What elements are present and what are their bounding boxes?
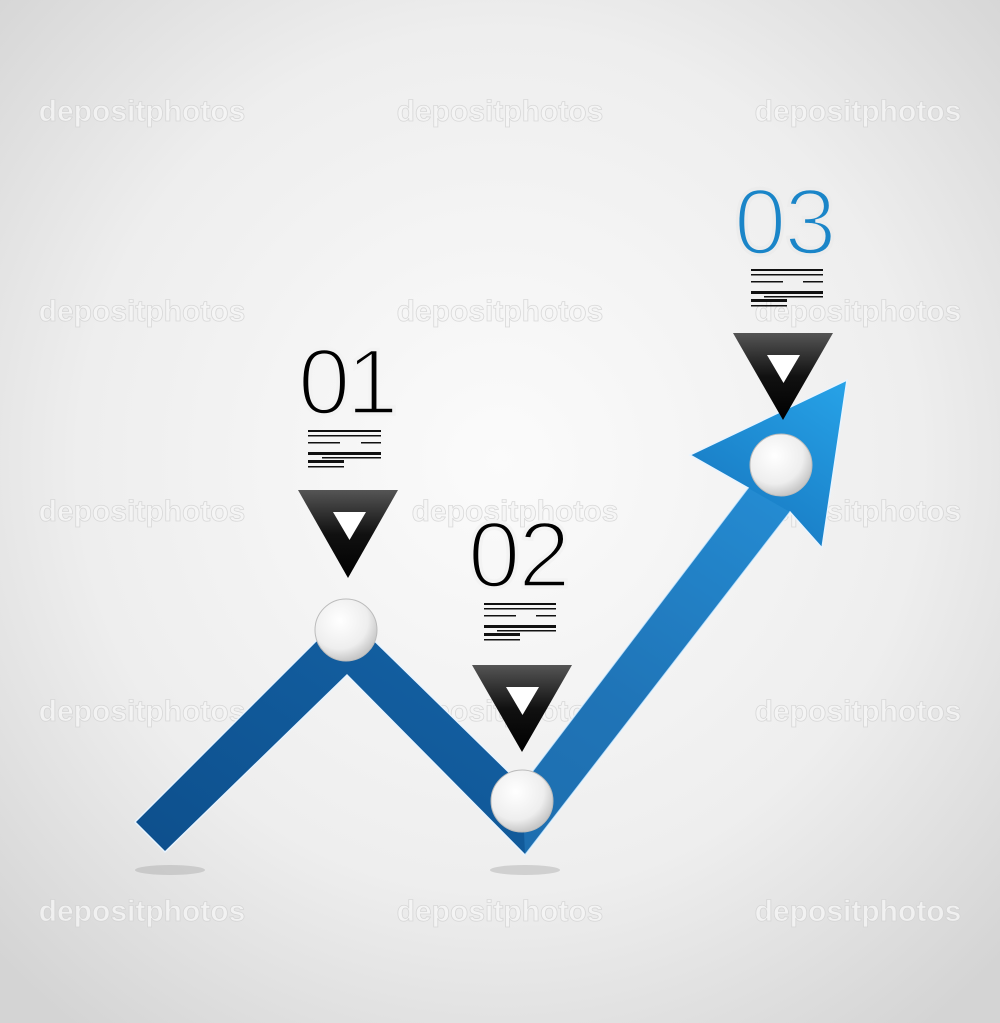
watermarks: depositphotos [397, 895, 603, 928]
watermarks: depositphotos [755, 895, 961, 928]
watermarks: depositphotos [397, 95, 603, 128]
watermarks: depositphotos [39, 295, 245, 328]
watermarks [39, 95, 961, 928]
node 01 [315, 599, 377, 661]
number 01: 01 [298, 329, 395, 434]
text lines 02 [484, 603, 556, 640]
watermarks: depositphotos [412, 495, 618, 528]
watermarks: depositphotos [39, 895, 245, 928]
watermarks: depositphotos [39, 95, 245, 128]
step 02 [468, 502, 572, 832]
watermarks: depositphotos [39, 695, 245, 728]
watermarks: depositphotos [755, 495, 961, 528]
text lines 03 [751, 269, 823, 306]
step 03 [733, 169, 835, 496]
marker triangle 01 [298, 490, 398, 578]
node 03 [750, 434, 812, 496]
watermarks: depositphotos [397, 695, 603, 728]
watermarks: depositphotos [755, 695, 961, 728]
number 03: 03 [734, 169, 835, 274]
watermarks: depositphotos [39, 495, 245, 528]
shadows under arrow [135, 865, 560, 875]
number 02: 02 [468, 502, 569, 607]
watermarks: depositphotos [755, 295, 961, 328]
arrow chart [135, 380, 847, 855]
marker triangle 03 [733, 333, 833, 420]
node 02 [491, 770, 553, 832]
text lines 01 [308, 430, 381, 468]
step 01 [298, 329, 398, 661]
watermarks: depositphotos [755, 95, 961, 128]
watermarks: depositphotos [397, 295, 603, 328]
marker triangle 02 [472, 665, 572, 752]
